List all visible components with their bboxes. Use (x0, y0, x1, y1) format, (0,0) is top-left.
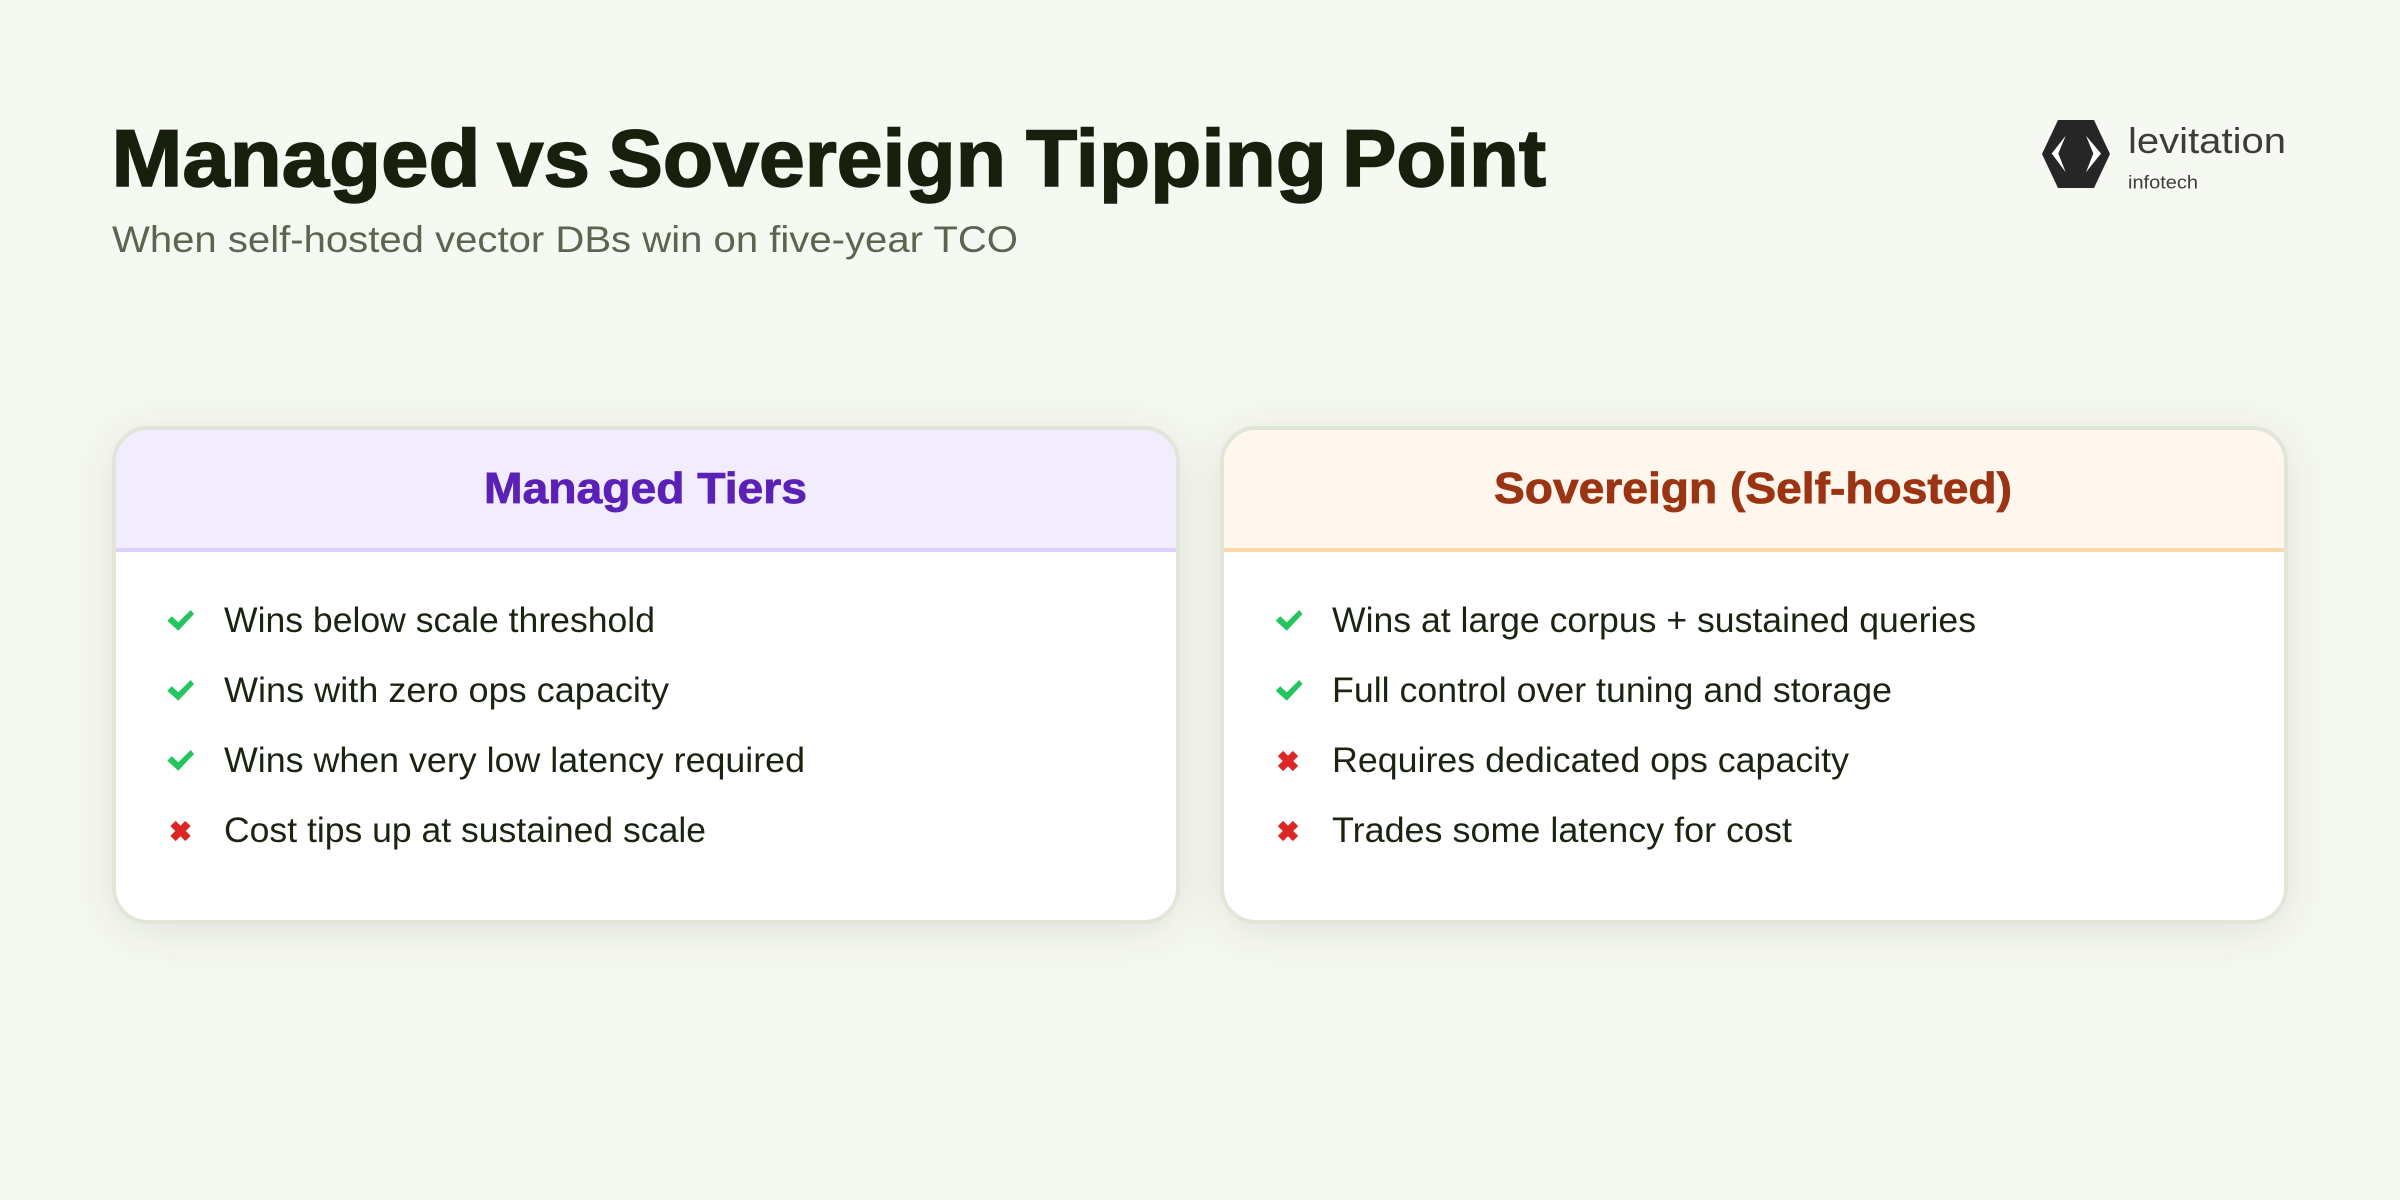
subtitle: When self-hosted vector DBs win on five-year TCO (112, 219, 1018, 260)
logo sub-wordmark: infotech (2128, 172, 2198, 192)
card header band (116, 430, 1176, 552)
icon: hexagon with chevrons (2042, 120, 2110, 188)
card heading: Sovereign (Self-hosted) (1494, 464, 2012, 513)
list item 2: Wins with zero ops capacity (224, 671, 670, 710)
card header band (1224, 430, 2284, 552)
list item 1: Wins below scale threshold (224, 601, 655, 640)
list item 3: Wins when very low latency required (224, 741, 805, 780)
title: Sovereign (608, 114, 1006, 204)
card body (1222, 428, 2286, 922)
title: Managed (112, 114, 480, 204)
title (112, 114, 1546, 204)
card body (114, 428, 1178, 922)
list item 1: Wins at large corpus + sustained queries (1332, 601, 1976, 640)
card heading: Managed Tiers (484, 464, 807, 513)
panel: sovereign self-hosted (1222, 428, 2286, 922)
title: Tipping (1026, 114, 1327, 204)
list item 4: Cost tips up at sustained scale (224, 811, 706, 850)
list item 2: Full control over tuning and storage (1332, 671, 1892, 710)
title: Point (1342, 114, 1546, 204)
list item 3: Requires dedicated ops capacity (1332, 741, 1850, 780)
logo wordmark: levitation (2128, 120, 2286, 161)
logo: levitation infotech (2042, 120, 2286, 192)
title: vs (497, 114, 590, 204)
list item 4: Trades some latency for cost (1332, 811, 1792, 850)
panel: managed tiers (114, 428, 1178, 922)
